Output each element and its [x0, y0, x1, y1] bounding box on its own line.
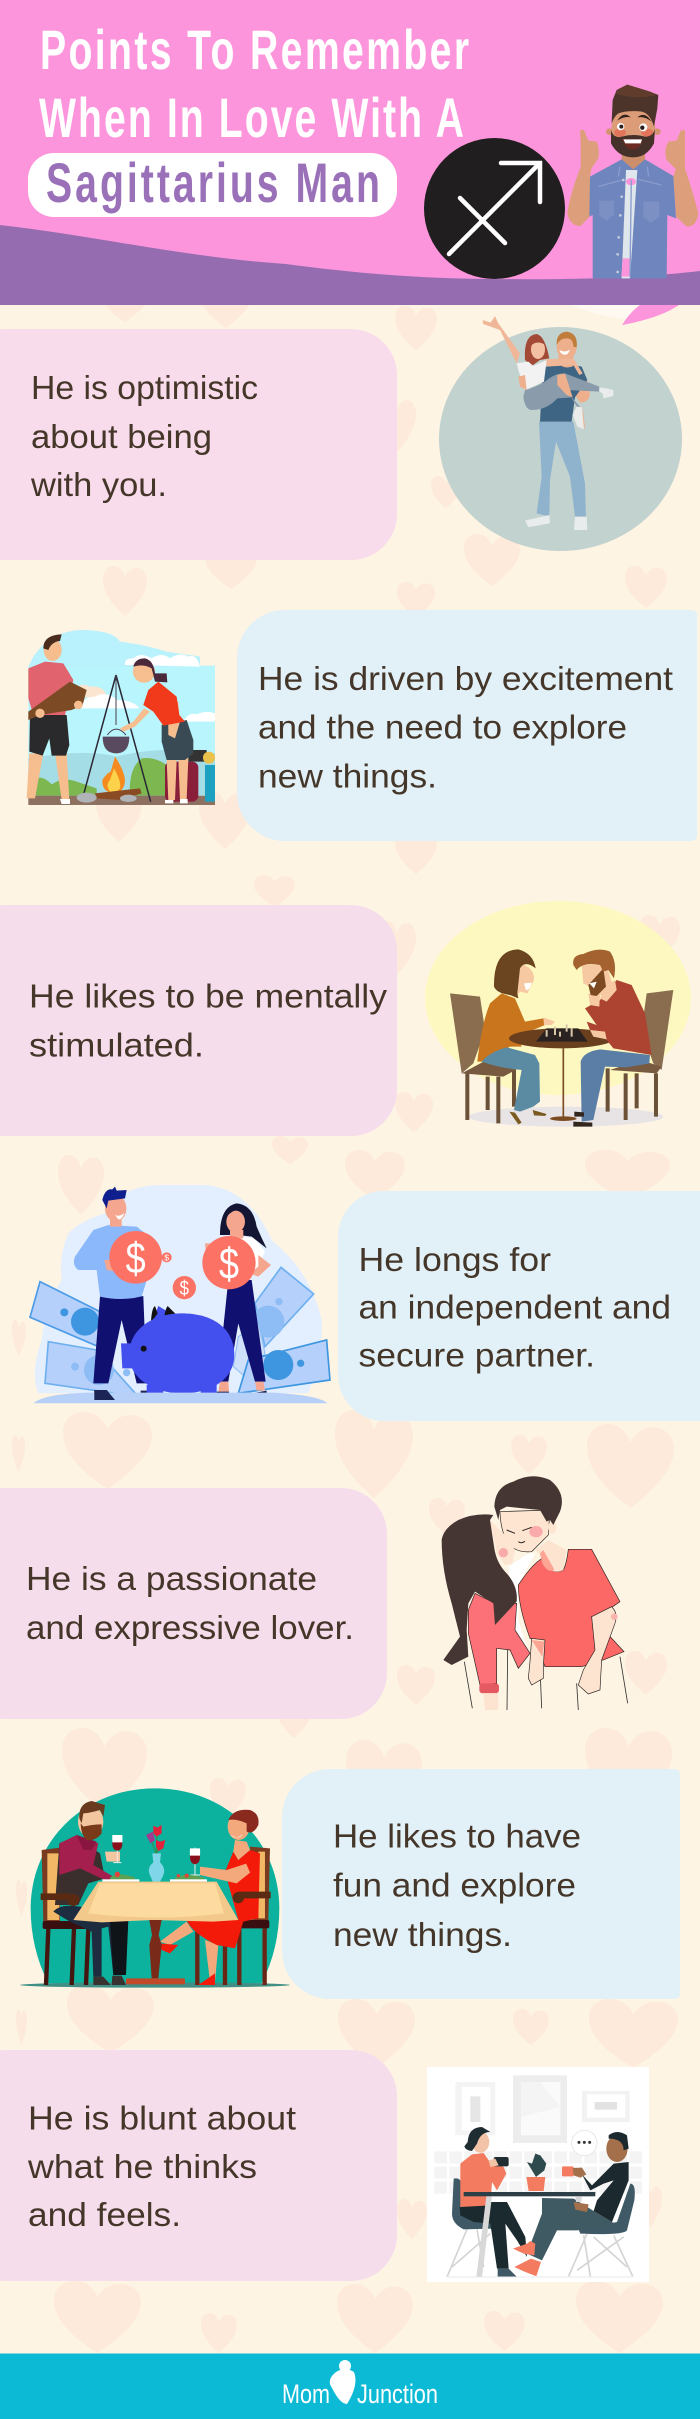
panel: optimistic — [0, 329, 397, 560]
illustration: couple talking at cafe table — [427, 2067, 649, 2282]
illustration: couple with piggy bank: $ — [180, 1278, 189, 1300]
illustration: couple dining — [20, 1788, 290, 1988]
panel: optimistic: about being — [31, 418, 212, 455]
illustration: smiling man with thumbs up — [567, 85, 698, 278]
panel: passionate lover: and expressive lover. — [26, 1609, 354, 1646]
panel: excitement: new things. — [258, 758, 437, 794]
panel: fun — [282, 1769, 680, 1999]
illustration: couple kissing — [442, 1476, 628, 1710]
illustration: man carrying woman — [439, 316, 682, 551]
title: When In Love With A — [39, 87, 464, 150]
logo: MomJunction: Junction — [357, 2379, 438, 2409]
panel: blunt: and feels. — [28, 2196, 181, 2233]
panel: mentally stimulated — [0, 905, 397, 1136]
panel: independent partner: an independent and — [358, 1288, 671, 1326]
panel: optimistic: He is optimistic — [31, 369, 258, 406]
panel: independent partner — [338, 1191, 700, 1421]
panel: independent partner: He longs for — [358, 1241, 551, 1278]
panel: optimistic: with you. — [30, 466, 167, 503]
panel: mentally stimulated: stimulated. — [29, 1026, 204, 1064]
illustration: couple with piggy bank: $ — [126, 1235, 146, 1283]
icon: sagittarius symbol — [424, 138, 565, 279]
panel: mentally stimulated: He likes to be mentally — [29, 978, 388, 1014]
panel: fun: He likes to have — [333, 1818, 581, 1854]
title: Sagittarius Man — [46, 152, 380, 215]
title: Points To Remember — [40, 19, 469, 82]
logo: MomJunction — [282, 2360, 438, 2409]
panel: passionate lover: He is a passionate — [26, 1560, 317, 1597]
illustration: couple camping — [27, 630, 215, 805]
panel: fun: fun and explore — [333, 1866, 576, 1904]
panel: independent partner: secure partner. — [358, 1336, 595, 1374]
panel: blunt: He is blunt about — [28, 2100, 296, 2136]
logo: MomJunction: Mom — [282, 2379, 330, 2409]
panel: blunt: what he thinks — [27, 2148, 257, 2185]
panel: blunt — [0, 2050, 397, 2281]
panel: excitement — [237, 610, 697, 841]
footer bar — [0, 2354, 700, 2419]
panel: passionate lover — [0, 1488, 387, 1719]
panel: excitement: and the need to explore — [258, 708, 627, 746]
illustration: couple with piggy bank: $ — [164, 1252, 169, 1262]
title — [28, 19, 469, 217]
illustration: couple with piggy bank: $ — [219, 1240, 239, 1288]
panel: fun: new things. — [333, 1916, 512, 1953]
illustration: couple with piggy bank — [30, 1185, 330, 1403]
panel: excitement: He is driven by excitement — [258, 660, 673, 697]
illustration: couple playing chess — [425, 901, 691, 1127]
